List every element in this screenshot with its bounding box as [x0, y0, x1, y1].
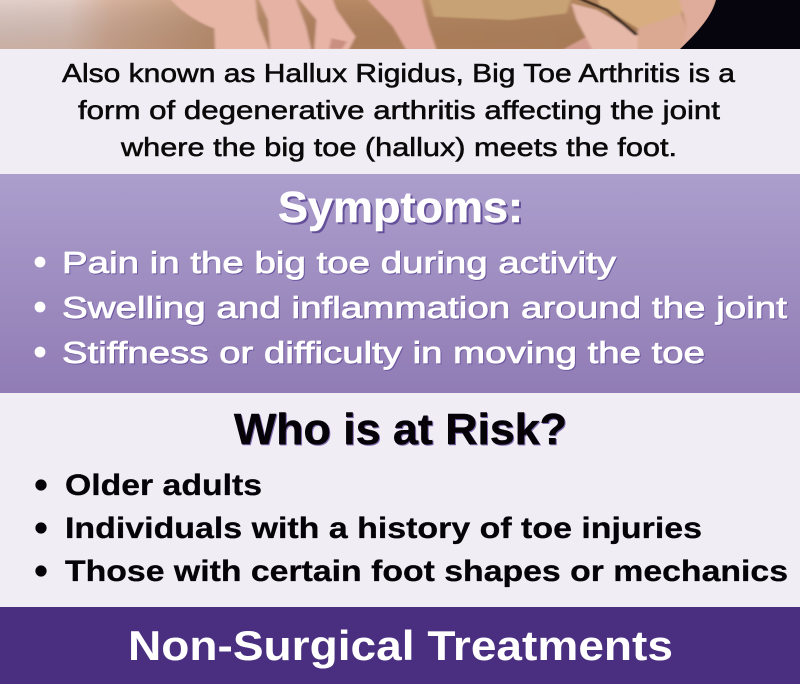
risk list: Individuals with a history of toe injuries [65, 512, 702, 545]
symptoms list: Swelling and inflammation around the joint [62, 290, 787, 325]
symptoms list: Stiffness or difficulty in moving the toe [63, 336, 706, 371]
heading: symptoms: Symptoms: [278, 183, 523, 232]
risk list [36, 469, 788, 588]
risk list: Older adults [65, 469, 262, 502]
risk list: Those with certain foot shapes or mechanics [65, 555, 788, 588]
footer banner: non-surgical treatments: Non-Surgical Treatments [128, 622, 673, 669]
symptoms list: Stiffness or difficulty in moving the toe [62, 335, 705, 370]
panel: symptoms [0, 174, 800, 393]
intro text block: Also known as Hallux Rigidus, Big Toe Arthritis is a [62, 58, 736, 88]
photo: hands on foot [0, 0, 800, 53]
heading: who is at risk: Who is at Risk? [235, 406, 568, 455]
intro text block: form of degenerative arthritis affecting the joint [78, 95, 721, 125]
symptoms list [35, 245, 788, 371]
symptoms list: Pain in the big toe during activity [63, 246, 618, 281]
intro text block: where the big toe (hallux) meets the foot. [120, 132, 677, 162]
heading: symptoms: Symptoms: [280, 185, 525, 234]
panel: who is at risk [36, 405, 788, 588]
heading: who is at risk: Who is at Risk? [234, 405, 567, 454]
symptoms list: Swelling and inflammation around the joint [63, 291, 788, 326]
symptoms list: Pain in the big toe during activity [62, 245, 617, 280]
intro text block [62, 58, 736, 162]
footer banner: non-surgical treatments [0, 607, 800, 684]
